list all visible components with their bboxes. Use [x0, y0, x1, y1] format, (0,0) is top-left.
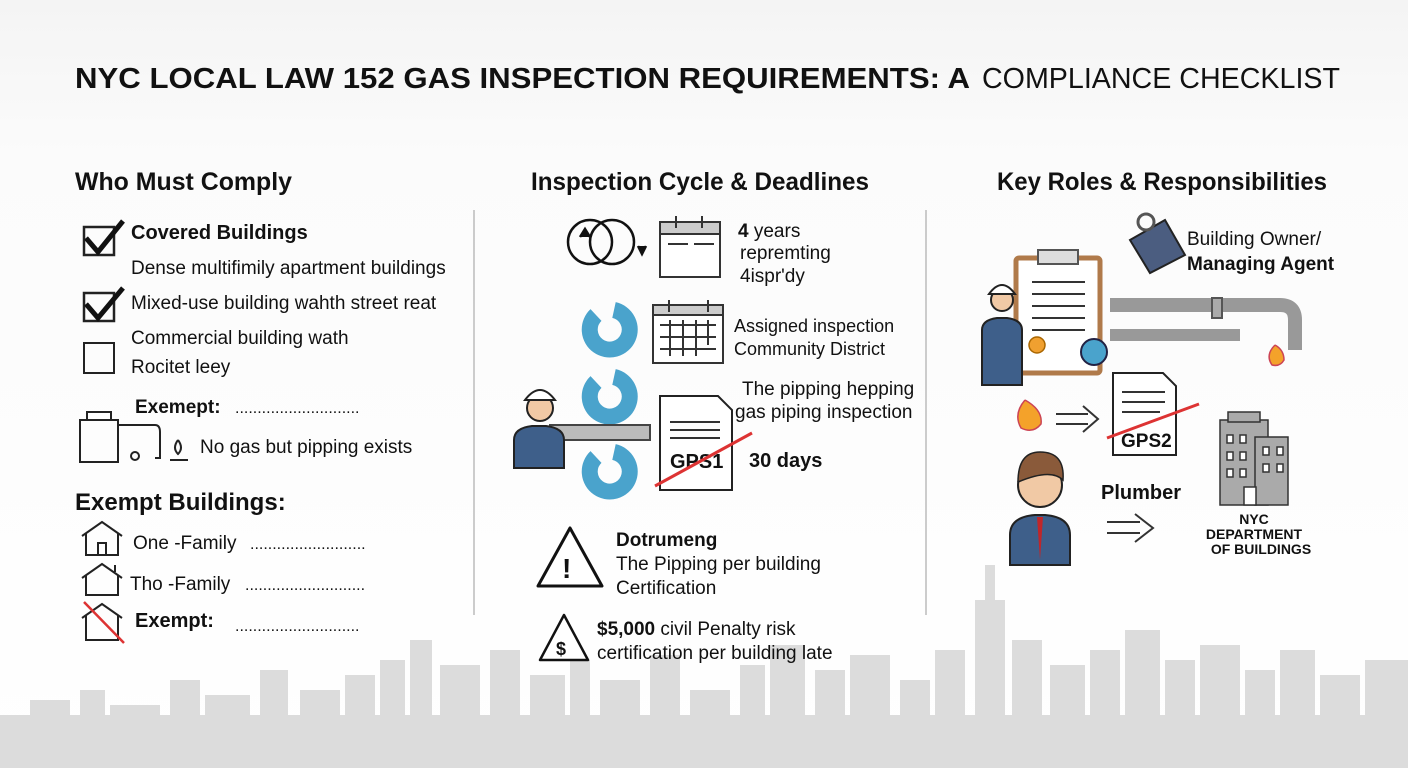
icon: penalty: $: [556, 639, 566, 659]
exempt list: One -Family: [133, 533, 237, 554]
checklist item: commercial: Rocitet leey: [131, 357, 231, 378]
exempt list: [82, 522, 366, 643]
text: certification: [616, 530, 821, 599]
text: piping inspection: [735, 379, 914, 423]
text: 4 years: 4 years: [738, 221, 800, 242]
text: certification: Certification: [616, 578, 716, 599]
checklist item: mixed-use: [84, 288, 437, 321]
icon: binder clip: [1130, 214, 1185, 273]
text: 4 years: repremting: [740, 243, 831, 264]
title: [75, 63, 1340, 95]
checklist item: covered buildings: Dense multifimily apartment buildings: [131, 258, 446, 279]
icon: pipe system: [1110, 298, 1295, 365]
panel: who must comply: [75, 168, 446, 643]
exempt note: no gas: [80, 397, 412, 462]
checklist item: covered buildings: [84, 221, 446, 279]
text: penalty: certification per building late: [597, 643, 833, 664]
panel: key roles: [982, 168, 1335, 565]
text: building owner: Building Owner/: [1187, 229, 1322, 250]
exempt note: no gas: ............................: [235, 400, 359, 417]
icon: blue cycle markers: [590, 310, 630, 492]
text: 4 years: 4ispr'dy: [740, 266, 805, 287]
text: piping inspection: gas piping inspection: [735, 402, 912, 423]
checklist item: commercial: [84, 328, 349, 378]
icon: plumber: [1010, 452, 1070, 565]
skyline background: [0, 565, 1408, 768]
text: certification: Dotrumeng: [616, 530, 717, 551]
text: penalty: $5,000 civil Penalty risk: [597, 619, 796, 640]
exempt list: ..........................: [250, 536, 366, 553]
text: assigned inspection: Assigned inspection: [734, 316, 894, 336]
checklist item: commercial: Commercial building wath: [131, 328, 349, 349]
text: NYC DOB: NYC: [1239, 511, 1269, 527]
text: certification: The Pipping per building: [616, 554, 821, 575]
icon: GPS2 document: [1107, 373, 1199, 455]
icon: calendar 1: [660, 216, 720, 277]
text: assigned inspection: Community District: [734, 339, 885, 359]
icon: clipboard: [1016, 250, 1107, 373]
title: COMPLIANCE CHECKLIST: [982, 63, 1340, 95]
text: 4 years: [738, 221, 831, 287]
heading: who must comply: Who Must Comply: [75, 168, 292, 196]
text: plumber: Plumber: [1101, 482, 1181, 504]
icon: worker: [982, 285, 1022, 385]
exempt note: no gas: No gas but pipping exists: [200, 437, 412, 458]
icon: calendar 2: [653, 300, 723, 363]
icon: GPS1 document: [655, 396, 752, 490]
panel: inspection cycle: [514, 168, 914, 664]
checklist item: covered buildings: Covered Buildings: [131, 222, 308, 244]
heading: key roles: Key Roles & Responsibilities: [997, 168, 1327, 196]
text: assigned inspection: [734, 316, 894, 359]
icon: cycle arrows: [568, 220, 646, 264]
text: penalty: [597, 619, 833, 664]
icon: GPS2 document: GPS2: [1121, 431, 1172, 452]
exempt list: Tho -Family: [130, 574, 231, 595]
exempt note: no gas: Exemept:: [135, 397, 221, 418]
text: 30 days: 30 days: [749, 450, 822, 472]
heading: exempt buildings: Exempt Buildings:: [75, 489, 286, 516]
text: building owner: [1187, 229, 1335, 275]
text: building owner: Managing Agent: [1187, 254, 1335, 275]
icon: flame and arrow: [1018, 400, 1098, 432]
icon: warning: !: [562, 553, 571, 584]
icon: DOB building: [1220, 412, 1288, 505]
title: NYC LOCAL LAW 152 GAS INSPECTION REQUIREMENTS: A: [75, 63, 970, 95]
text: NYC DOB: OF BUILDINGS: [1211, 541, 1311, 557]
icon: penalty: [540, 615, 588, 660]
arrow: plumber to DOB: [1107, 514, 1153, 542]
text: piping inspection: The pipping hepping: [742, 379, 914, 400]
text: NYC DOB: DEPARTMENT: [1206, 526, 1303, 542]
text: NYC DOB: [1206, 511, 1311, 557]
heading: inspection cycle: Inspection Cycle & Deadlines: [531, 168, 869, 196]
icon: inspector with pipe: [514, 390, 650, 468]
checklist item: mixed-use: Mixed-use building wahth street reat: [131, 293, 437, 314]
icon: GPS1 document: GPS1: [670, 451, 723, 473]
icon: warning: [538, 528, 602, 586]
exempt list: ............................: [235, 618, 359, 635]
exempt list: ...........................: [245, 577, 365, 594]
exempt list: Exempt:: [135, 610, 214, 632]
